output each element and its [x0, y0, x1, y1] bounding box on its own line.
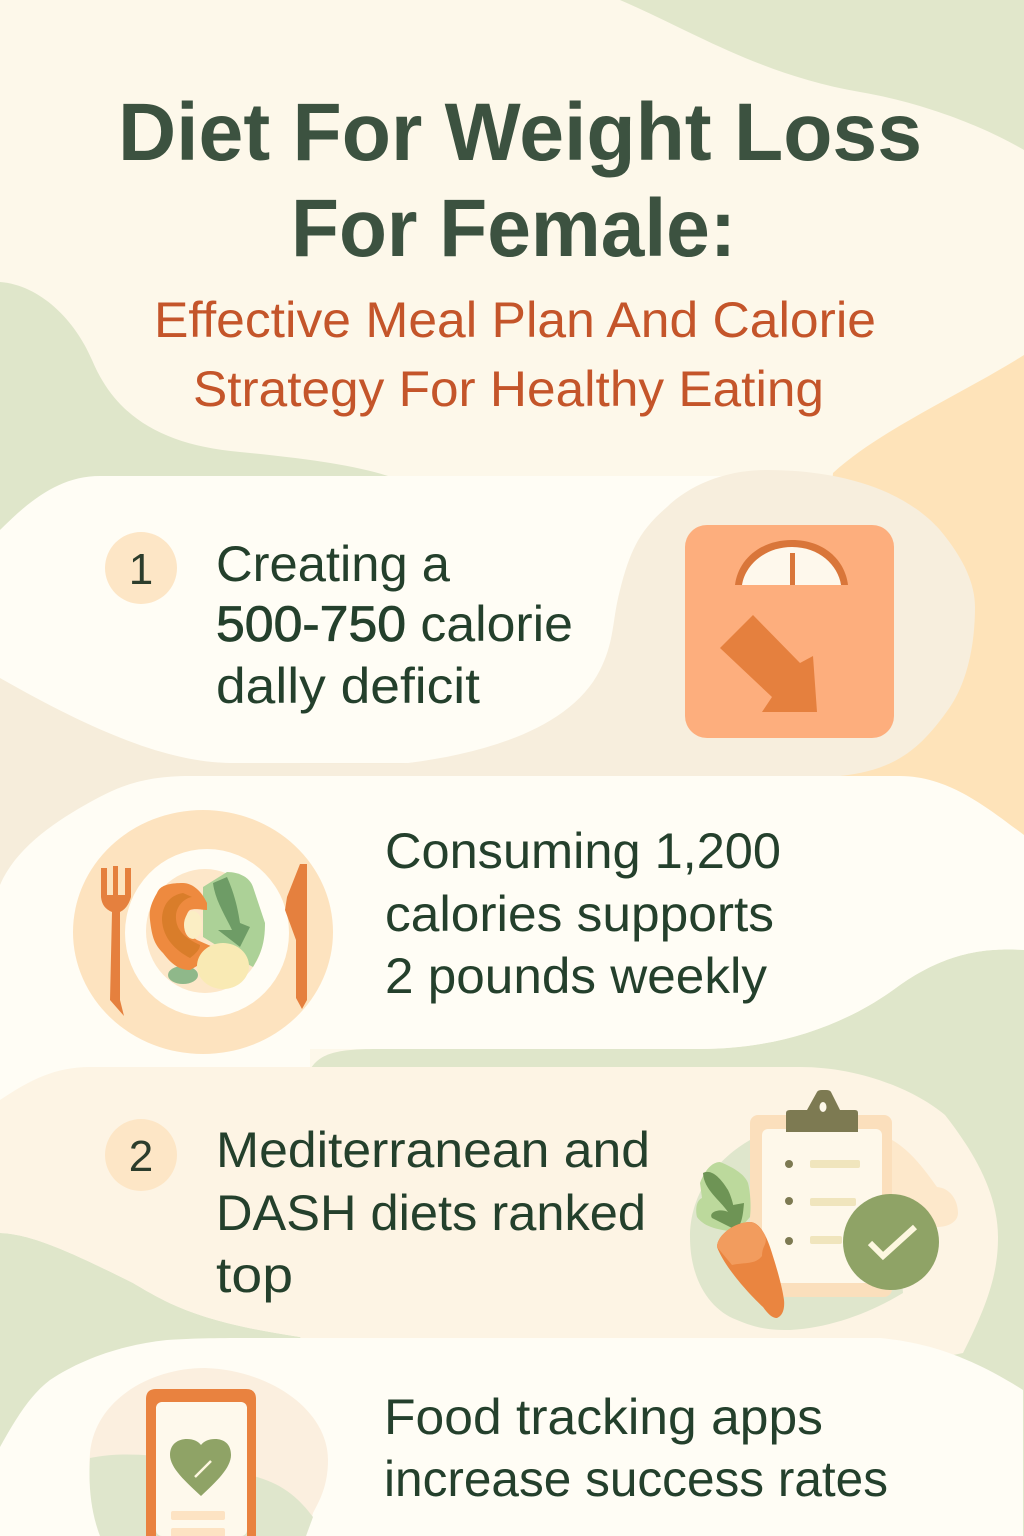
- subtitle: [154, 292, 876, 417]
- row band: 4: [0, 1338, 1023, 1536]
- row band: 2: [0, 776, 1024, 1100]
- text: food tracking apps: increase success rates: [384, 1451, 888, 1507]
- background shape: lower left green: [0, 1233, 400, 1460]
- row band: 1: [0, 476, 760, 763]
- subtitle: Effective Meal Plan And Calorie: [154, 292, 876, 348]
- background shape: lower right green: [310, 949, 1024, 1536]
- icon: phone with heart: [89, 1368, 328, 1536]
- icon: clipboard with carrot and check: [690, 1090, 958, 1330]
- background shape: top right green: [620, 0, 1024, 150]
- background shape: right orange: [800, 355, 1024, 860]
- number badge 1: 1: [129, 545, 153, 594]
- title: [118, 87, 922, 274]
- title: For Female:: [291, 183, 736, 274]
- text: Mediterranean and DASH: Mediterranean and: [216, 1122, 650, 1178]
- text: calorie deficit: dally deficit: [216, 658, 480, 714]
- text: 1,200 calories: calories supports: [385, 886, 774, 942]
- title: Diet For Weight Loss: [118, 87, 922, 178]
- text: food tracking apps: Food tracking apps: [384, 1389, 823, 1445]
- number badge 2: [105, 1119, 177, 1191]
- text: calorie deficit: 500-750 calorie: [216, 596, 573, 652]
- text: 1,200 calories: 2 pounds weekly: [385, 948, 767, 1004]
- subtitle: Strategy For Healthy Eating: [193, 361, 824, 417]
- background shape: left green: [0, 282, 400, 540]
- text: 1,200 calories: Consuming 1,200: [385, 823, 781, 879]
- text: Mediterranean and DASH: top: [216, 1247, 293, 1303]
- text: 1,200 calories: [385, 823, 781, 1004]
- text: Mediterranean and DASH: [216, 1122, 650, 1303]
- icon: plate with fork and knife: [73, 810, 333, 1054]
- number badge 1: [105, 532, 177, 604]
- row band: 3: [0, 1067, 998, 1370]
- text: food tracking apps: [384, 1389, 888, 1507]
- text: Mediterranean and DASH: DASH diets ranked: [216, 1185, 646, 1241]
- icon: scale with down arrow: [685, 525, 894, 738]
- background shape: mid left beige: [0, 678, 420, 900]
- text: calorie deficit: [216, 536, 573, 714]
- number badge 2: 2: [129, 1132, 153, 1181]
- text: calorie deficit: Creating a: [216, 536, 450, 592]
- row 1 icon backdrop: [300, 470, 975, 776]
